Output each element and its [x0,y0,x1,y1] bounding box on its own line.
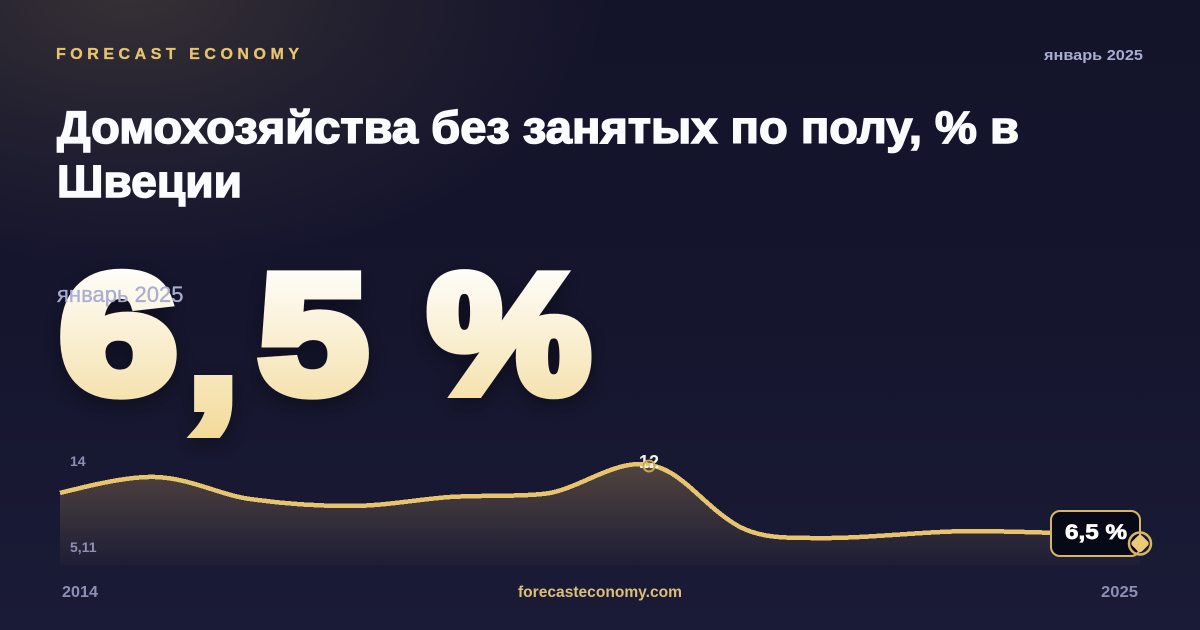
big value [60,240,590,442]
title [57,102,1019,207]
chart line [60,464,1060,538]
x axis end label: 2025 [1101,584,1138,601]
big value: 5 [259,240,367,428]
end marker [1129,532,1151,554]
big value: % [428,241,590,429]
date top right: январь 2025 [1044,47,1143,64]
big value: 6 [60,241,177,428]
end value badge [1051,511,1140,556]
axis min label: 5,11 [70,539,97,555]
area chart [60,464,1140,565]
chart area fill [60,464,1140,565]
axis max label: 14 [70,453,86,469]
x axis start label: 2014 [62,584,98,601]
title: Швеции [57,156,242,207]
date subtitle overlapping value: январь 2025 [57,282,184,307]
peak value label: 12 [639,452,659,472]
peak marker [644,460,654,472]
end value badge: 6,5 % [1065,521,1127,544]
title: Домохозяйства без занятых по полу, % в [57,102,1019,153]
source url: forecasteconomy.com [518,584,682,601]
big value: , [188,254,238,442]
brand label: FORECAST ECONOMY [56,46,299,63]
